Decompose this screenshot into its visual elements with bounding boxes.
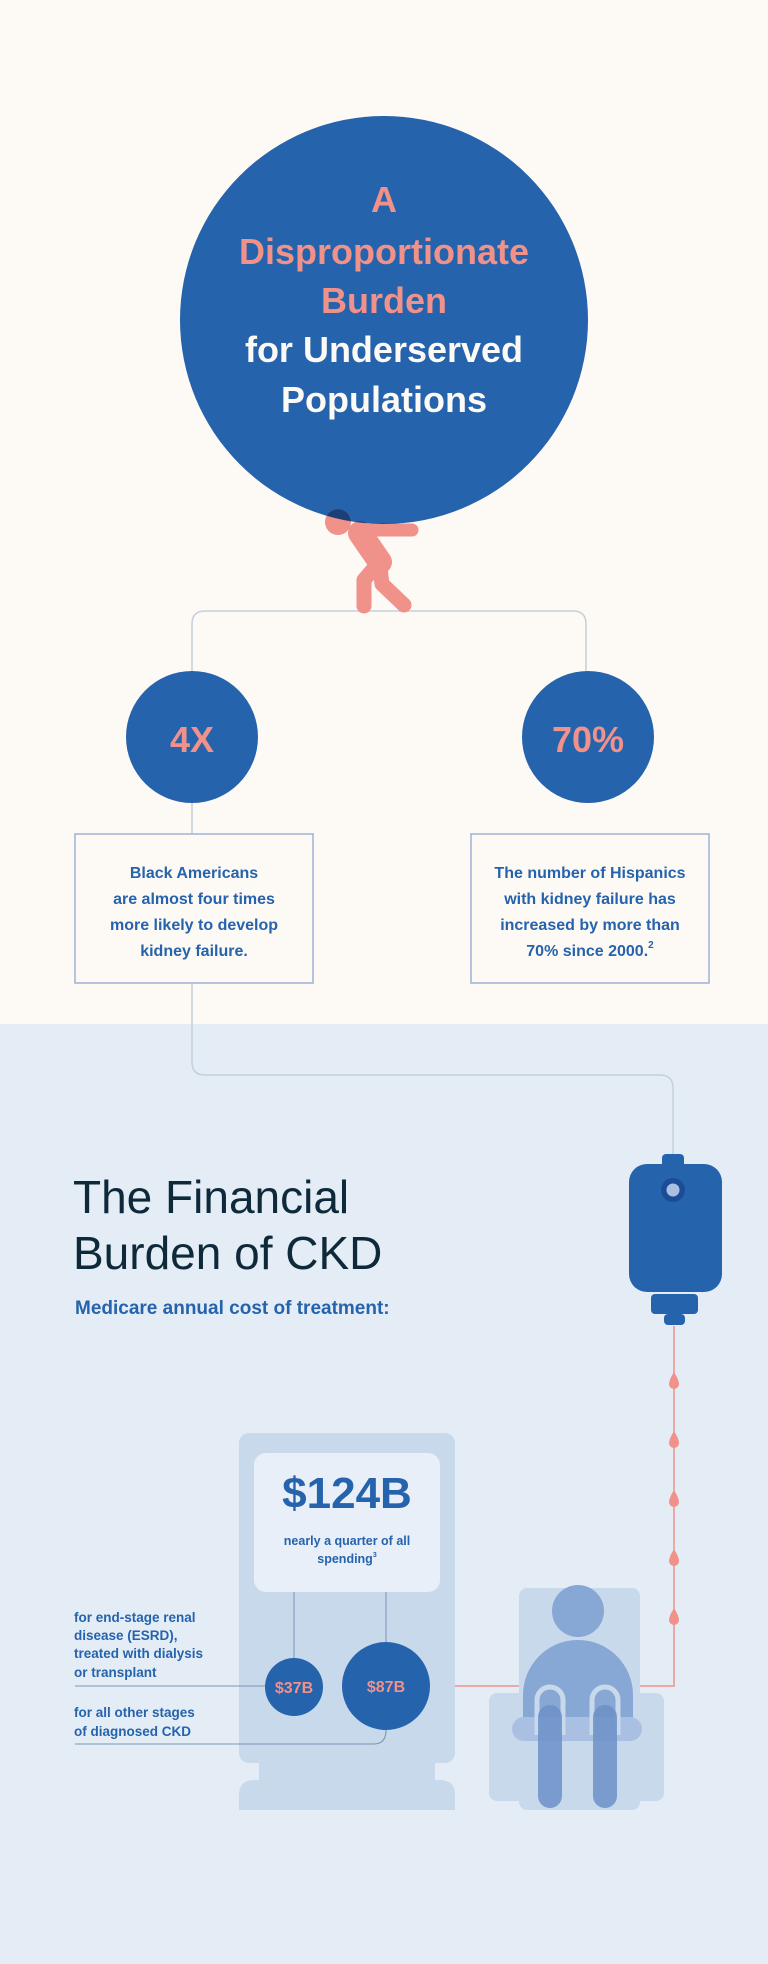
label: ESRD: disease (ESRD),	[74, 1628, 178, 1643]
text box: Black Americans: kidney failure.	[140, 943, 248, 960]
circle: $87B	[342, 1642, 430, 1730]
card: $124B: $124B	[282, 1469, 412, 1518]
label: other stages: for all other stages	[74, 1705, 195, 1720]
title: A	[371, 179, 397, 220]
heading: financial burden: The Financial	[73, 1171, 349, 1223]
title: Disproportionate	[239, 231, 529, 272]
heading: financial burden: Burden of CKD	[73, 1227, 382, 1279]
circle: $37B	[265, 1658, 323, 1716]
title	[239, 179, 529, 420]
icon: IV bag	[629, 1154, 722, 1325]
text box: Hispanics: 70% since 2000.	[526, 943, 648, 960]
stat: 4X: 4X	[170, 719, 214, 760]
icon: figure carrying burden	[325, 509, 412, 606]
text box: Hispanics: with kidney failure has	[503, 891, 676, 908]
label: ESRD: treated with dialysis	[74, 1646, 203, 1661]
label: other stages: of diagnosed CKD	[74, 1724, 191, 1739]
stat: 4X	[126, 671, 258, 803]
label: other stages	[74, 1705, 195, 1739]
icon: patient in chair	[489, 1585, 664, 1810]
text box: Hispanics: increased by more than	[500, 917, 680, 934]
dialysis machine	[75, 1433, 455, 1810]
text box: Hispanics: The number of Hispanics	[494, 865, 686, 882]
title circle	[180, 116, 588, 524]
red IV line with drops	[432, 1326, 679, 1686]
text box: Black Americans: more likely to develop	[110, 917, 278, 934]
label: ESRD: for end-stage renal	[74, 1610, 196, 1625]
text box: Hispanics: 2	[648, 940, 654, 951]
title: for Underserved	[245, 329, 523, 370]
text box: Black Americans	[75, 834, 313, 983]
title: Populations	[281, 379, 487, 420]
text box: Black Americans: are almost four times	[113, 891, 275, 908]
text box: Hispanics	[471, 834, 709, 983]
stat: 70%	[522, 671, 654, 803]
card: $124B	[254, 1453, 440, 1592]
label: ESRD: or transplant	[74, 1665, 157, 1680]
card: $124B: 3	[373, 1552, 377, 1559]
stat: 70%: 70%	[552, 719, 624, 760]
card: $124B: nearly a quarter of all	[284, 1534, 410, 1548]
subheading: Medicare annual cost of treatment:	[75, 1298, 390, 1319]
title: Burden	[321, 280, 447, 321]
label: ESRD	[74, 1610, 203, 1680]
connector lines top	[192, 611, 673, 1154]
heading: financial burden	[73, 1171, 382, 1279]
circle: $37B: $37B	[275, 1680, 313, 1697]
text box: Black Americans: Black Americans	[130, 865, 258, 882]
card: $124B: spending	[317, 1552, 373, 1566]
circle: $87B: $87B	[367, 1679, 405, 1696]
